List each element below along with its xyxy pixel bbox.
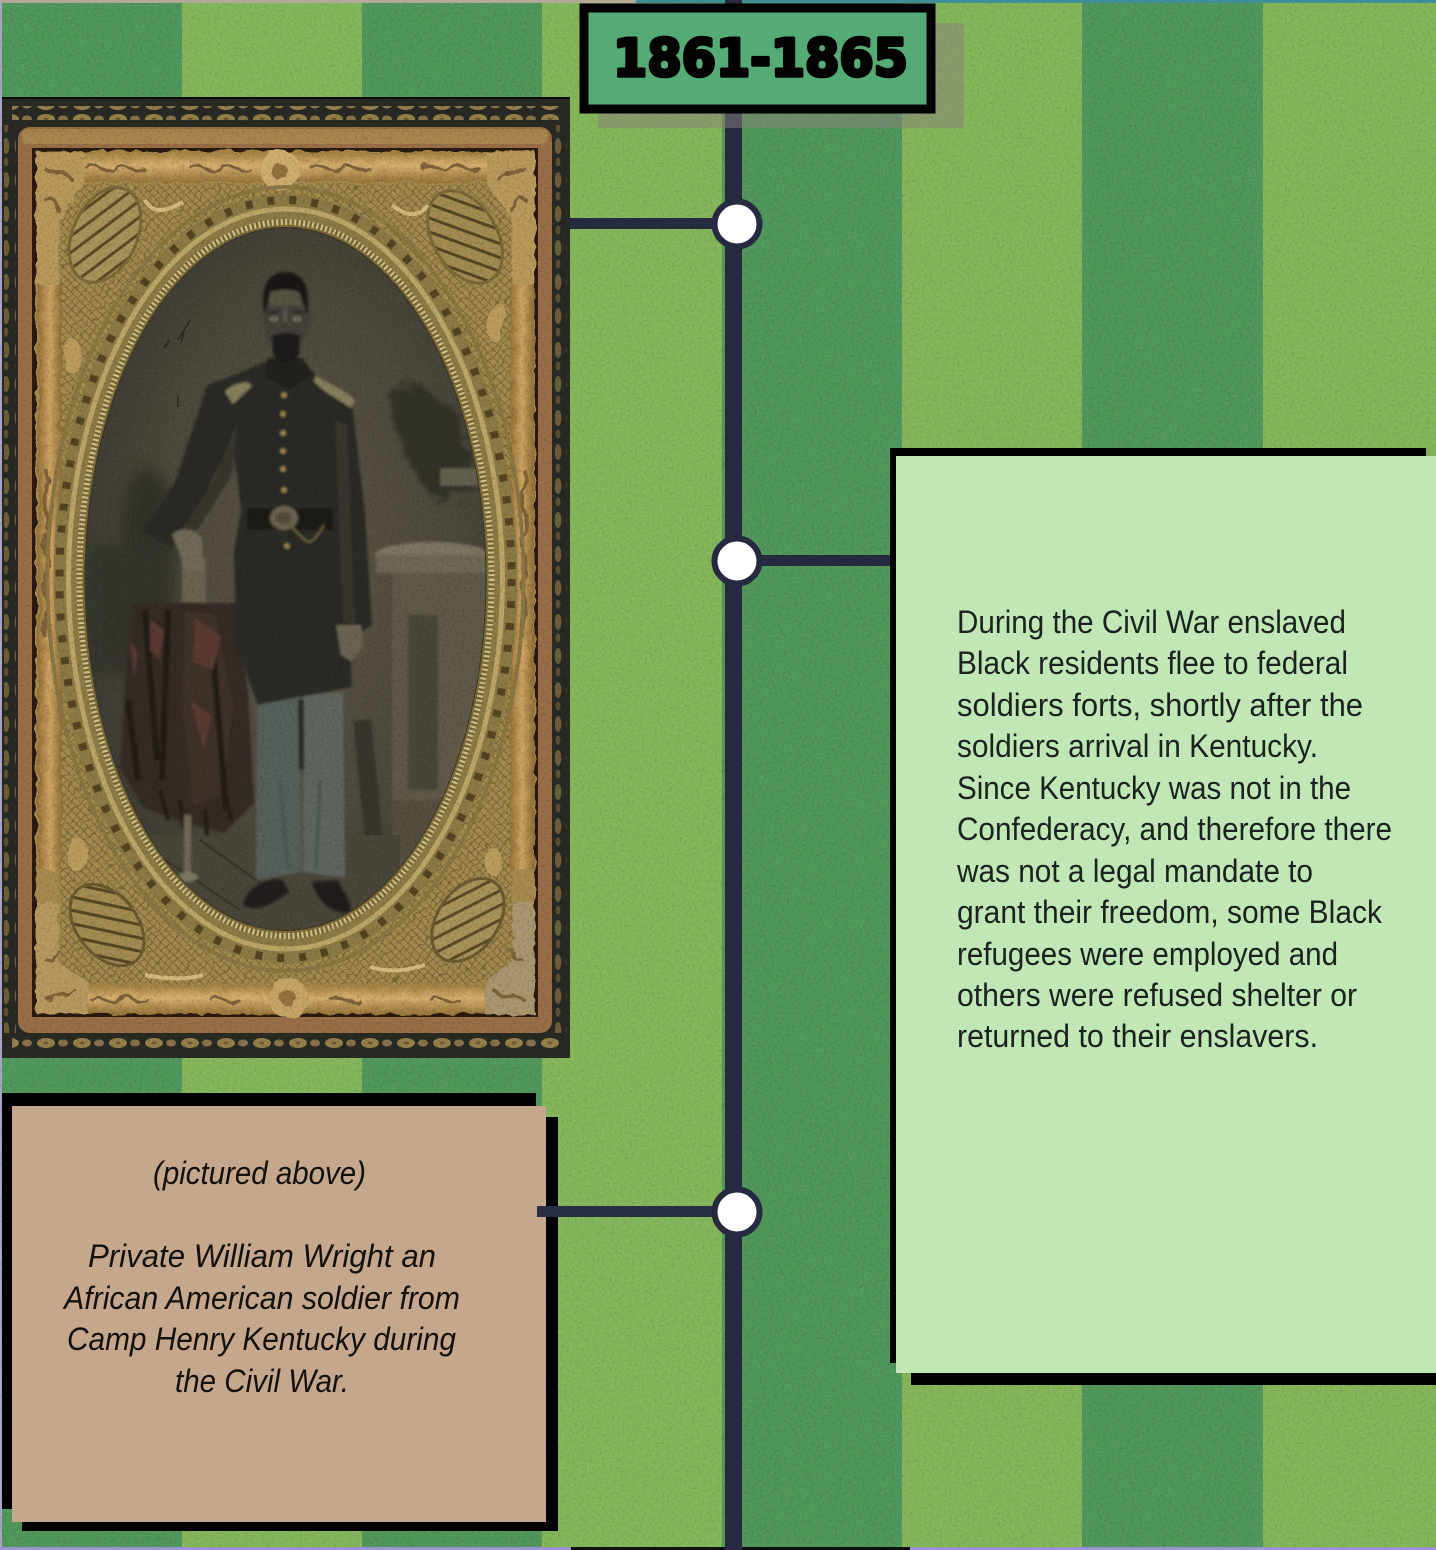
gilt mount <box>36 150 535 1018</box>
body text: grant their freedom, some Black <box>957 894 1383 930</box>
buttons <box>280 392 290 549</box>
caption text <box>62 1155 460 1399</box>
body text: Black residents flee to federal <box>957 645 1348 681</box>
panel black offset frame <box>890 448 1436 1385</box>
rail ornaments <box>85 165 480 1003</box>
panel fill <box>896 456 1436 1373</box>
coat <box>143 360 372 705</box>
top edge strip <box>0 0 1436 3</box>
caption text: (pictured above) <box>153 1155 366 1191</box>
shoes <box>243 879 289 908</box>
bottom edge strip <box>0 1547 1436 1550</box>
painted backdrop trees <box>86 381 474 675</box>
side rail ornaments <box>44 470 526 638</box>
connector: photo to first marker <box>570 218 716 229</box>
oval rings <box>48 187 524 971</box>
soldier <box>143 272 372 913</box>
marker: first timeline node <box>714 202 760 246</box>
body text: Confederacy, and therefore there <box>957 811 1392 847</box>
caption text: Private William Wright an <box>88 1238 436 1274</box>
side rails <box>38 280 62 870</box>
body text: soldiers forts, shortly after the <box>957 687 1363 723</box>
case outer <box>2 97 570 1058</box>
body text: was not a legal mandate to <box>956 853 1313 889</box>
tintype plate <box>80 225 492 935</box>
heading text: 1861-1865 <box>613 29 908 89</box>
body text: soldiers arrival in Kentucky. <box>957 728 1318 764</box>
photo grain <box>2 97 570 1058</box>
connector: caption to third marker <box>537 1206 717 1217</box>
heading drop shadow <box>598 23 964 128</box>
plate scratches <box>164 320 190 407</box>
body text <box>956 604 1392 1054</box>
photograph: Private William Wright in gilt case <box>2 97 570 1058</box>
body text: others were refused shelter or <box>957 977 1357 1013</box>
copper mat <box>18 127 552 1033</box>
head <box>259 309 265 327</box>
heading box <box>584 8 931 109</box>
corner ornaments <box>36 152 84 284</box>
marker: second timeline node <box>714 538 760 584</box>
marker: third timeline node <box>714 1190 760 1234</box>
panel: Civil War refugees text <box>890 448 1436 1385</box>
connector: body text panel to second marker <box>760 555 894 566</box>
caption text: Camp Henry Kentucky during <box>67 1321 456 1357</box>
caption fill <box>12 1106 546 1522</box>
body text: During the Civil War enslaved <box>957 604 1346 640</box>
timeline vertical line <box>725 0 742 1550</box>
floor <box>149 835 400 930</box>
neck and collar <box>264 358 314 390</box>
caption text: the Civil War. <box>175 1363 349 1399</box>
corner shields <box>55 176 519 980</box>
panel: photo caption <box>2 1093 558 1531</box>
belt and buckle <box>247 508 333 530</box>
body text: returned to their enslavers. <box>957 1018 1318 1054</box>
epaulettes <box>225 382 252 404</box>
top and bottom rails <box>38 152 533 182</box>
body text: refugees were employed and <box>957 936 1338 972</box>
hands <box>172 529 204 573</box>
caption text: African American soldier from <box>62 1280 460 1316</box>
body text: Since Kentucky was not in the <box>957 770 1351 806</box>
draped table <box>120 558 254 882</box>
date heading: 1861-1865 <box>584 8 964 128</box>
caption black offset frame <box>2 1093 558 1531</box>
legs <box>256 696 302 880</box>
pedestal <box>362 468 492 892</box>
